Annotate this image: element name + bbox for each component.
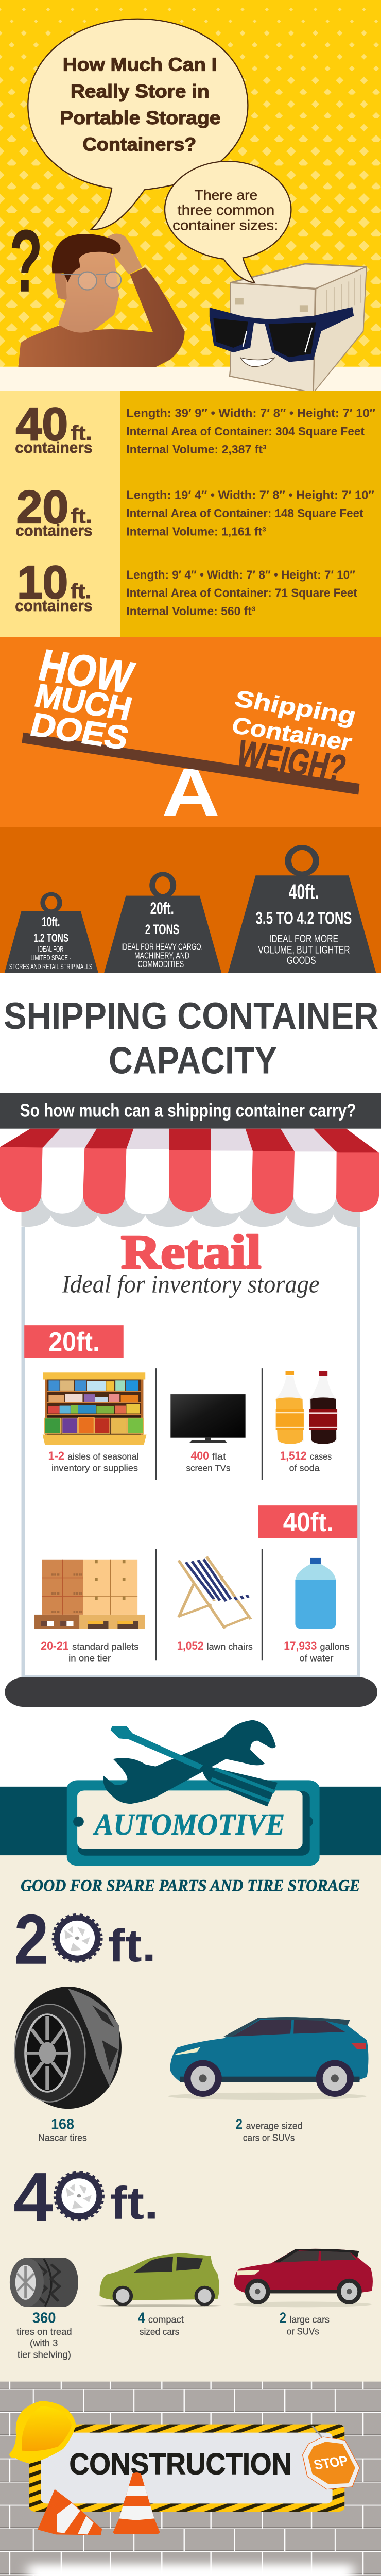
speech bubble: three container sizes: container sizes: [172,217,278,233]
banner: automotive [0,1720,381,2109]
illustration: soda bottles [276,1371,337,1444]
caption: tires on tread [16,2310,72,2360]
heading: how much does a shipping container weigh: HOW [34,640,138,703]
speech bubble: main question: Containers? [82,134,196,155]
size: 20 ft: containers [15,521,92,539]
heading: how much does a shipping container weigh: MUCH [31,677,136,727]
size: 20 ft: ft. [71,505,92,528]
caption: pallets: 20-21 [41,1640,69,1652]
weight: 40 ft [228,848,376,973]
speech bubble: main question: How Much Can I [63,54,217,75]
caption: nascar tires: 168 [51,2116,74,2132]
speech bubble: three container sizes [165,161,291,283]
sign: construction [29,2425,344,2512]
illustration: water jug [295,1558,336,1629]
caption: tires on tread: tires on tread [16,2326,72,2337]
panel: cream strip below hero [0,367,381,391]
panel: retail 40 ft [5,1494,377,1707]
caption: compact cars: sized cars [140,2326,179,2337]
illustration: nascar tire [14,1987,122,2109]
heading: how much does a shipping container weigh: DOES [27,706,133,756]
illustration: store shelves [43,1372,147,1445]
caption: pallets: in one tier [68,1653,111,1664]
label: 40 ft with tire: 4 [13,2158,53,2236]
weight: 40 ft: 40ft. [289,880,319,904]
illustration: thinking man [18,233,185,367]
caption: lawn chairs: 1,052 [177,1640,203,1652]
heading: retail: Retail [121,1225,261,1279]
size: 10 ft: 10 [17,556,68,608]
size: 40 ft: Internal Volume: 2,387 ft³ [126,443,267,456]
icon: fallen traffic cone [38,2489,102,2535]
caption: soda: of soda [289,1463,320,1473]
size: 10 ft: ft. [71,580,91,603]
caption: aisles: aisles of seasonal [67,1451,138,1462]
caption: soda: cases [310,1451,332,1462]
label: 40 ft with tire [13,2158,159,2236]
panel: construction brick wall [0,2382,381,2576]
shelf bar [5,1677,377,1707]
caption: tvs [186,1450,230,1473]
illustration: store awning [0,1129,381,1227]
caption: lawn chairs [177,1640,253,1652]
caption: tvs: screen TVs [186,1463,230,1473]
panel: hero background [0,0,381,371]
heading: automotive: AUTOMOTIVE [93,1807,285,1841]
caption: nascar tires: Nascar tires [38,2132,87,2143]
weight: 10 ft: 1.2 TONS [33,932,68,944]
caption: compact cars [138,2310,184,2337]
illustration: smiling container with sunglasses [210,264,367,393]
weight: 20 ft: 2 TONS [145,921,179,937]
heading: how much does a shipping container weigh: Shipping [232,686,359,730]
weight: 10 ft: 10ft. [42,915,60,929]
caption: average cars: cars or SUVs [243,2132,295,2143]
illustration: pallet of boxes [34,1560,145,1629]
caption: soda [280,1450,332,1473]
caption: tvs: 400 [190,1450,209,1462]
caption: average cars: 2 [236,2116,243,2132]
weight: 20 ft [104,874,221,973]
weight: 20 ft: IDEAL FOR HEAVY CARGO, [121,942,203,952]
caption: soda: 1,512 [280,1450,307,1462]
caption: tires on tread: 360 [32,2310,56,2326]
size: 20 ft: Internal Volume: 1,161 ft³ [126,525,266,538]
panel: automotive background [0,1855,381,2382]
banner: so how much can a shipping container carry [0,1093,381,1129]
caption: compact cars: compact [148,2314,184,2325]
caption: aisles: 1-2 [48,1450,64,1462]
size: 40 ft: ft. [71,422,92,445]
title: shipping container capacity [4,995,378,1082]
icon: hard hat [9,2401,76,2464]
label: 20 ft with tire: 2 [14,1900,48,1979]
tag: 20 ft: 20ft. [48,1327,99,1357]
speech bubble: main question: Really Store in [71,81,210,102]
size: 20 ft [15,481,374,539]
icon: question mark: ? [9,212,43,311]
panel: weights by container size [0,827,381,1227]
icon: wrench and screwdriver [103,1720,278,1806]
illustration: red suv [233,2249,373,2307]
caption: pallets [41,1640,138,1664]
seesaw beam [22,733,359,794]
panel: retail [22,1225,360,1494]
tag: 40 ft: 40ft. [283,1507,334,1537]
weight: 10 ft: LIMITED SPACE - [30,953,71,962]
size: 20 ft: 20 [16,481,68,533]
illustration: lawn chair [179,1556,251,1629]
icon: fulcrum letter A: A [162,754,220,831]
caption: compact cars: 4 [138,2310,145,2326]
caption: water: 17,933 [284,1640,317,1652]
size: 10 ft [15,556,357,618]
caption: large cars: large cars [290,2314,330,2325]
weight: 10 ft: STORES AND RETAIL STRIP MALLS [9,962,92,971]
size: 40 ft [15,398,375,456]
caption: nascar tires [38,2116,87,2143]
speech bubble: main question [28,19,248,229]
caption: tires on tread: (with 3 [30,2337,58,2348]
weight: 40 ft: GOODS [287,954,316,967]
caption: aisles [48,1450,138,1473]
hero illustrations and speech bubbles [9,19,367,393]
tag: 40 ft [258,1505,357,1538]
tag: 20 ft [24,1325,124,1358]
panel: automotive capacity [10,2116,373,2360]
illustration: blue suv [168,2017,368,2100]
speech bubble: main question: Portable Storage [60,108,221,128]
size: 10 ft: Internal Volume: 560 ft³ [126,605,255,618]
title: shipping container capacity: CAPACITY [109,1040,277,1082]
size: 40 ft: containers [15,438,92,456]
illustration: stacked tires [10,2258,78,2307]
illustration: green compact car [96,2253,222,2307]
size: 10 ft: containers [15,597,92,615]
caption: aisles: inventory or supplies [51,1463,138,1473]
illustration: flat screen tv [170,1394,246,1443]
caption: tires on tread: tier shelving) [18,2349,71,2360]
heading: how much does a shipping container weigh [27,640,359,790]
caption: large cars: or SUVs [287,2326,319,2337]
icon: stop sign: STOP [312,2452,350,2472]
caption: water: gallons [320,1641,350,1652]
weight: 10 ft [4,894,98,973]
caption: large cars [280,2310,330,2337]
weight: 10 ft: IDEAL FOR [38,944,63,953]
weight: 20 ft: COMMODITIES [138,959,184,969]
label: 20 ft with tire: ft. [108,1920,156,1972]
caption: large cars: 2 [280,2310,286,2326]
label: 20 ft with tire [14,1900,156,1979]
icon: upright traffic cone [113,2472,160,2534]
label: 40 ft with tire: ft. [110,2177,159,2229]
speech bubble: three container sizes: three common [178,202,274,218]
caption: water: of water [299,1653,334,1664]
panel: weight heading seesaw [0,637,381,831]
weight: 20 ft: 20ft. [150,899,174,918]
panel: container sizes [0,391,381,637]
speech bubble: three container sizes: There are [195,187,257,203]
caption: lawn chairs: lawn chairs [207,1641,253,1652]
caption: pallets: standard pallets [72,1641,138,1652]
caption: tvs: flat [212,1451,226,1462]
heading: how much does a shipping container weigh: Container [229,713,355,756]
caption: water [284,1640,350,1664]
size: 40 ft: 40 [16,398,68,450]
weight: 20 ft: MACHINERY, AND [134,951,189,961]
icon: stop sign [303,2426,359,2489]
caption: average cars [236,2116,303,2143]
caption: average cars: average sized [246,2120,303,2131]
